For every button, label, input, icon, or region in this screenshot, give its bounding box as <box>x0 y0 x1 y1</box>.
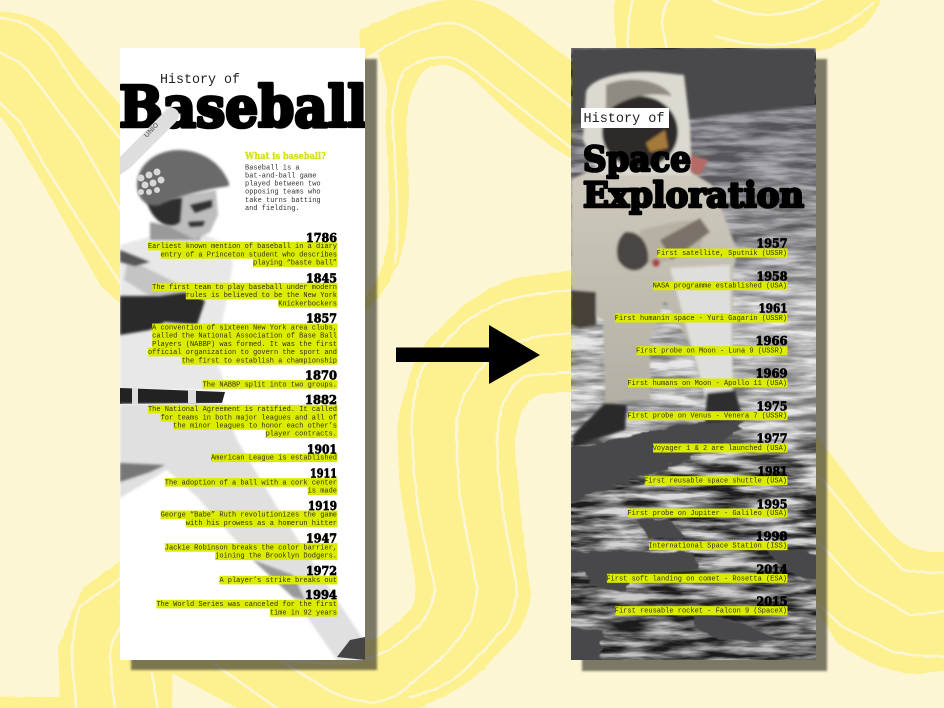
title: Space Exploration: Exploration <box>583 175 804 216</box>
timeline entry: 1961: 1961 <box>758 302 788 316</box>
text: baseball definition: bat-and-ball game <box>245 173 316 181</box>
timeline entry: 1857: A convention of sixteen New York area clubs, <box>152 325 337 333</box>
timeline entry: 1845: rules is believed to be the New York <box>186 292 337 300</box>
timeline entry: 1919: 1919 <box>308 499 337 513</box>
timeline entry: 1972: 1972 <box>306 564 337 578</box>
timeline entry: 1977 <box>653 432 788 453</box>
timeline entry: 1966 <box>636 334 788 356</box>
timeline entry: 1786: 1786 <box>306 231 337 245</box>
timeline entry: 1882: 1882 <box>305 393 337 407</box>
timeline entry: 1975: First probe on Venus - Venera 7 (USSR) <box>627 413 787 421</box>
legs <box>120 404 365 660</box>
timeline entry: 1958 <box>653 270 788 291</box>
timeline entry: 1961 <box>615 302 788 323</box>
timeline entry: 1957 <box>657 236 788 258</box>
timeline entry: 1882: The National Agreement is ratified. It called <box>148 406 337 414</box>
ground shadows <box>566 422 822 665</box>
bat <box>120 108 179 175</box>
timeline entry: 2015: 2015 <box>756 595 788 609</box>
panel: History of Baseball <box>119 48 367 660</box>
timeline entry: 1901: American League is established <box>211 455 337 463</box>
timeline entry: 1870: The NABBP split into two groups. <box>203 381 337 389</box>
helmet decals <box>138 168 164 195</box>
timeline entry: 1998: 1998 <box>756 530 788 544</box>
text: baseball definition: opposing teams who <box>245 189 321 197</box>
panel shadow: right <box>582 59 827 671</box>
timeline entry: 1969: 1969 <box>756 366 788 380</box>
timeline entry: 2014: First soft landing on comet - Rosetta (ESA) <box>606 575 787 583</box>
timeline entry: 1969: First humans on Moon - Apollo 11 (USA) <box>627 380 787 388</box>
timeline entry: 1786: playing “baste ball” <box>253 260 337 268</box>
timeline entry: 1845: Knickerbockers <box>278 300 337 308</box>
timeline entry: 1981: 1981 <box>758 465 788 479</box>
timeline entry: 1911: 1911 <box>310 467 337 481</box>
timeline entry: 1870: 1870 <box>305 368 337 382</box>
timeline entry: 1919: George “Babe” Ruth revolutionizes the game <box>161 512 337 520</box>
timeline entry: 1981: First reusable space shuttle (USA) <box>644 478 787 486</box>
title: History of: History of <box>160 73 240 88</box>
heading box: History of: History of <box>584 112 664 127</box>
timeline entry: 1957: First satellite, Sputnik (USSR) <box>657 250 787 258</box>
tonal wash <box>571 105 816 660</box>
timeline entry: 1845: 1845 <box>306 272 337 286</box>
text: baseball definition: played between two <box>245 181 321 189</box>
timeline entry: 1998: International Space Station (ISS) <box>648 543 787 551</box>
timeline entry: 1994: The World Series was canceled for the first <box>156 601 337 609</box>
timeline entry: 1882: player contracts. <box>266 431 337 439</box>
timeline entry: 1845 <box>152 272 338 308</box>
panel shadow: left <box>131 59 377 670</box>
timeline entry: 1995 <box>627 497 788 518</box>
timeline entry: 1882: for teams in both major leagues and all of <box>161 414 337 422</box>
photo: astronaut on the Moon <box>566 48 822 665</box>
ear flap <box>146 198 182 226</box>
helmet <box>137 150 229 206</box>
neck <box>150 222 200 240</box>
astronaut suit <box>571 165 743 447</box>
timeline entry: 1975 <box>627 400 788 421</box>
timeline entry: 1786 <box>148 231 338 268</box>
timeline entry: 1995: 1995 <box>756 497 788 511</box>
astronaut helmet <box>583 72 708 175</box>
title: Space Exploration: Space <box>583 139 691 180</box>
heading box: History of <box>581 108 669 128</box>
timeline entry: 1972: A player’s strike breaks out <box>219 577 337 585</box>
timeline entry: 1994: 1994 <box>305 588 337 602</box>
timeline entry: 1961: First humanin space - Yuri Gagarin (USSR) <box>615 315 787 323</box>
timeline entry: 1911: The adoption of a ball with a cork center <box>165 479 337 487</box>
timeline entry: 1975: 1975 <box>756 400 788 414</box>
timeline entry: 1966: 1966 <box>756 334 788 348</box>
text: baseball definition: and fielding. <box>245 205 300 213</box>
timeline entry: 1911 <box>165 467 338 496</box>
timeline entry: 1981 <box>644 465 788 486</box>
timeline entry: 1882: the minor leagues to honor each other’s <box>173 422 337 430</box>
photo: baseball batter <box>120 108 365 660</box>
timeline entry: 1857: 1857 <box>306 312 337 326</box>
timeline entry: 1977: 1977 <box>756 432 788 446</box>
timeline entry: 1857 <box>148 312 338 365</box>
timeline entry: 2014 <box>606 562 788 583</box>
timeline entry: 1972 <box>219 564 338 585</box>
timeline entry: 1947: Jackie Robinson breaks the color barrier, <box>165 544 337 552</box>
timeline entry: 1995: First probe on Jupiter - Galileo (USA) <box>627 510 787 518</box>
timeline entry: 1947 <box>165 532 338 561</box>
timeline entry: 1958: NASA programme established (USA) <box>653 283 787 291</box>
bat: UNIO <box>143 121 161 139</box>
text: baseball definition: Baseball is a <box>245 164 300 172</box>
sky <box>571 48 816 125</box>
shoe <box>337 637 365 660</box>
timeline entry: 1969 <box>627 366 788 388</box>
timeline entry: 1845: The first team to play baseball under modern <box>152 284 337 292</box>
panel: History of Space Exploration <box>566 48 822 665</box>
arm <box>124 264 185 296</box>
timeline entry: 1901: 1901 <box>307 442 337 456</box>
jersey lettering <box>120 292 205 335</box>
timeline entry: 1857: Players (NABBP) was formed. It was the first <box>152 341 337 349</box>
timeline entry: 1786: entry of a Princeton student who describes <box>161 251 337 259</box>
timeline entry: 1957: 1957 <box>756 236 788 250</box>
face <box>170 190 218 240</box>
timeline entry: 2015: First reusable rocket - Falcon 9 (SpaceX) <box>615 608 787 616</box>
text: baseball definition: take turns batting <box>245 197 321 205</box>
timeline entry: 1857: called the National Association of Base Ball <box>152 333 337 341</box>
timeline entry: 1911: is made <box>308 488 337 496</box>
title: Baseball: Baseball <box>119 74 367 140</box>
arrow <box>396 325 540 384</box>
timeline entry: 2015 <box>615 595 788 616</box>
title: Space Exploration <box>583 139 804 216</box>
timeline entry: 1947: 1947 <box>306 532 337 546</box>
timeline entry: 1870 <box>203 368 338 389</box>
pale gap below the left panel <box>172 673 250 708</box>
timeline entry: 1958: 1958 <box>756 270 788 284</box>
timeline entry: 1857: the first to establish a championship <box>182 357 337 365</box>
body: shirt <box>120 234 233 390</box>
timeline entry: 1919 <box>161 499 338 528</box>
timeline entry: 1994: time in 92 years <box>270 609 337 617</box>
timeline entry: 1998 <box>648 530 788 551</box>
belt <box>120 388 225 404</box>
timeline entry: 1966: First probe on Moon - Luna 9 (USSR) <box>636 348 783 356</box>
lunar surface <box>571 48 816 660</box>
timeline entry: 1977: Voyager 1 & 2 are launched (USA) <box>653 445 787 453</box>
timeline entry: 1857: official organization to govern the sport and <box>148 349 337 357</box>
timeline entry: 2014: 2014 <box>756 562 788 576</box>
timeline entry: 1901 <box>211 442 338 463</box>
timeline entry: 1882 <box>148 393 338 439</box>
text: baseball definition <box>245 164 321 213</box>
timeline entry: 1947: joining the Brooklyn Dodgers. <box>215 553 337 561</box>
timeline entry: 1994 <box>156 588 338 617</box>
timeline entry: 1919: with his prowess as a homerun hitter <box>186 520 337 528</box>
subheading: What is baseball?: What is baseball? <box>244 151 326 162</box>
timeline entry: 1786: Earliest known mention of baseball in a diary <box>148 243 337 251</box>
